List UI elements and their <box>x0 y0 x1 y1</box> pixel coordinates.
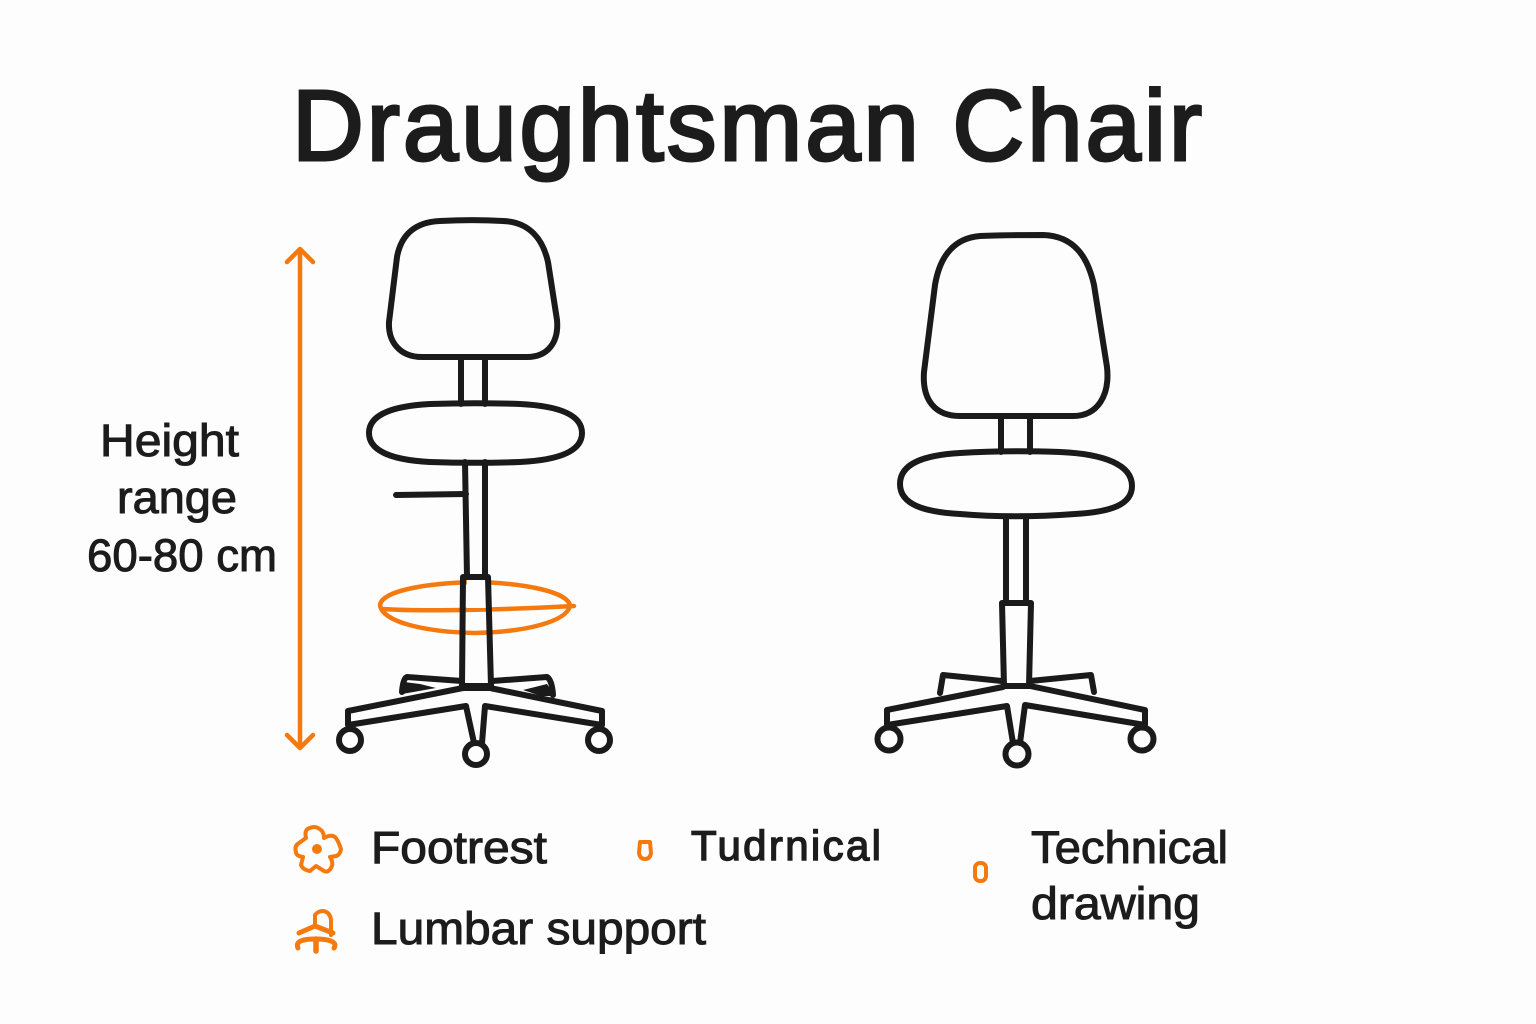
icon: flower <box>295 827 341 872</box>
left chair backrest <box>389 220 557 357</box>
left chair seat <box>369 403 582 463</box>
left chair casters <box>339 729 610 765</box>
right chair column <box>1006 517 1026 602</box>
right chair backrest <box>924 235 1107 416</box>
label: Technical drawing: drawing <box>1031 878 1200 929</box>
right chair: standard chair <box>878 235 1154 766</box>
footrest ring <box>380 582 574 633</box>
left chair gas cylinder <box>462 577 491 686</box>
legend: technical drawing <box>975 822 1228 929</box>
right chair seat <box>900 451 1132 516</box>
height range label <box>87 415 277 581</box>
legend: Tudrnical <box>639 822 881 869</box>
left chair: draughtsman chair with footrest <box>339 220 610 765</box>
height range label: 60-80 cm <box>87 530 277 581</box>
icon: small orange marker <box>975 863 986 881</box>
left chair back legs <box>402 677 553 695</box>
left chair base <box>348 688 602 743</box>
height lever <box>396 494 466 495</box>
label: Tudrnical: Tudrnical <box>691 822 881 869</box>
right chair casters <box>878 728 1154 766</box>
icon: small orange marker <box>639 842 651 859</box>
height range arrow <box>287 249 313 748</box>
right chair back legs <box>940 675 1094 693</box>
title: Draughtsman Chair <box>292 70 1205 182</box>
label: Lumbar support: Lumbar support <box>371 903 707 954</box>
label: Footrest: Footrest <box>371 822 548 873</box>
left chair neck <box>461 358 485 404</box>
left chair column <box>465 462 485 577</box>
height range label: range <box>117 472 237 523</box>
icon: lumbar <box>297 911 335 951</box>
right chair gas cylinder <box>1002 603 1031 686</box>
height range label: Height <box>100 415 240 466</box>
column interior mask <box>467 578 486 608</box>
right chair base <box>887 686 1145 743</box>
legend: lumbar support <box>297 903 707 954</box>
right chair neck <box>1001 417 1030 452</box>
legend: footrest <box>295 822 548 873</box>
label: Technical drawing <box>1031 822 1228 929</box>
label: Technical drawing: Technical <box>1031 822 1228 873</box>
